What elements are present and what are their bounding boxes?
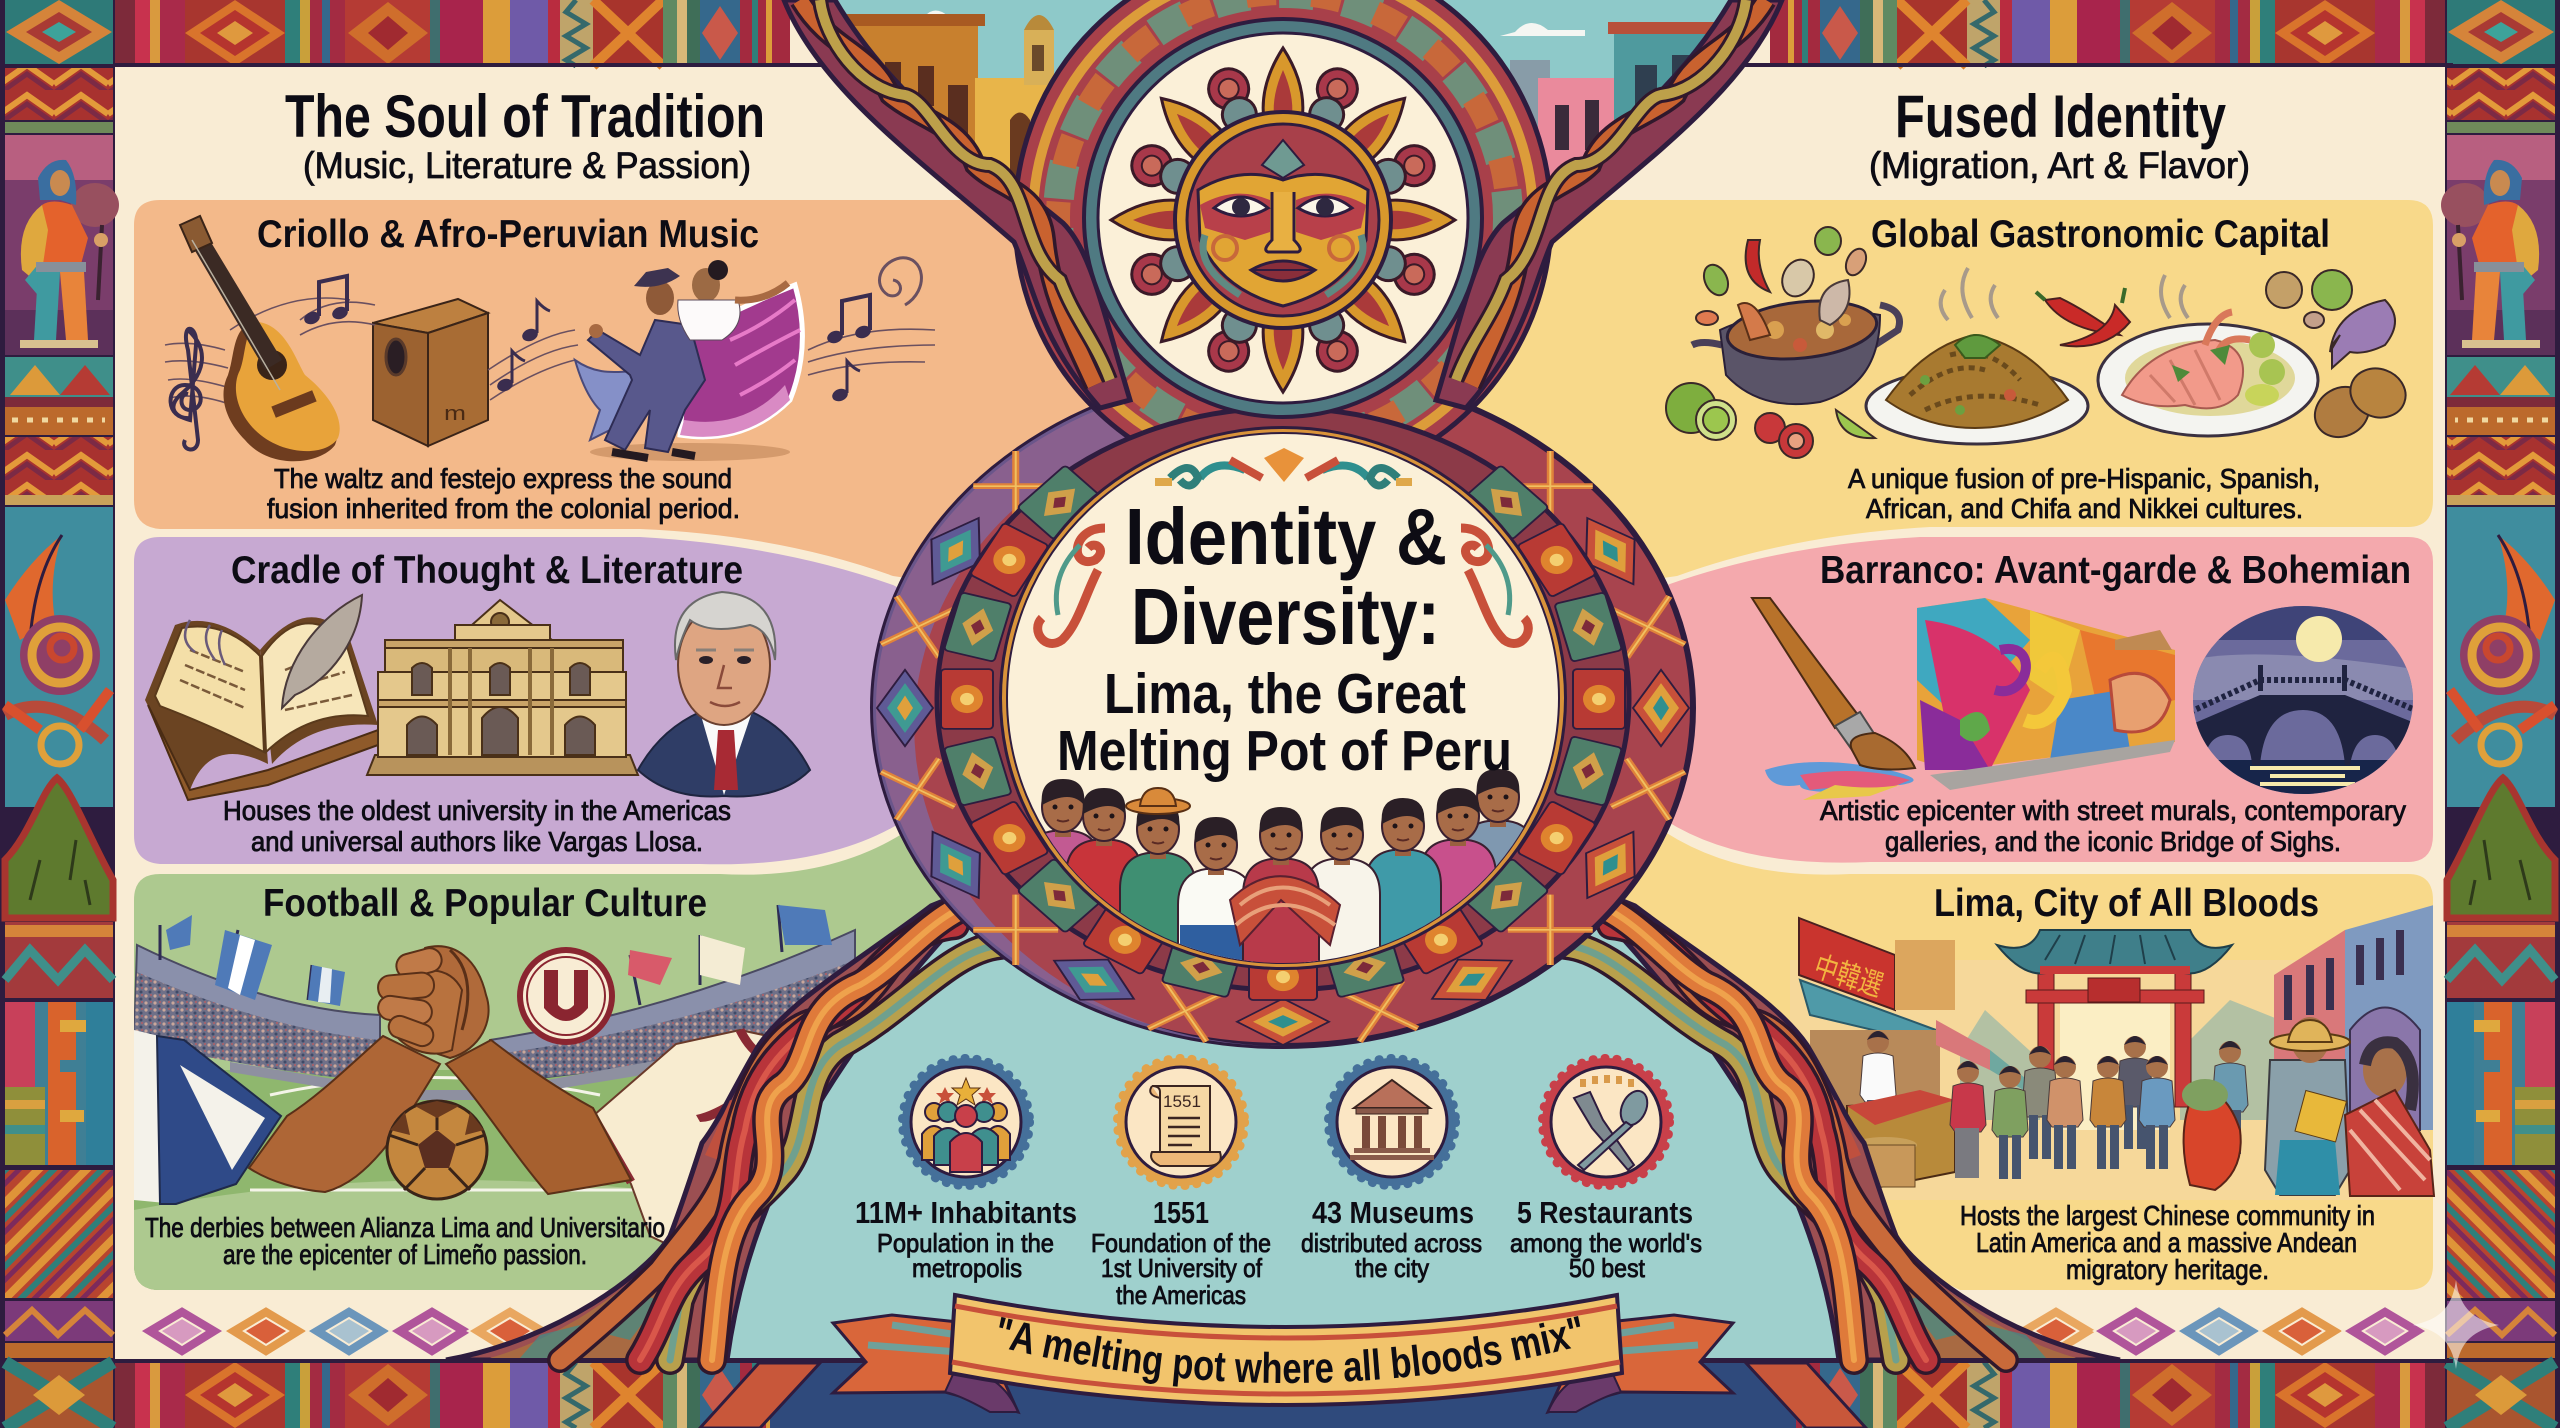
panel: city of all bloods background [1560, 800, 2433, 1290]
literature text: and universal authors like Vargas Llosa. [251, 826, 703, 857]
panel: central medallion outer ring [873, 370, 1693, 1046]
panel: football background [134, 800, 1000, 1290]
panel: gastronomy background [1440, 200, 2433, 610]
football text: The derbies between Alianza Lima and Universitario [145, 1212, 665, 1243]
stat text: inhabitants: 11M+ Inhabitants [855, 1195, 1077, 1230]
gastronomy text: Global Gastronomic Capital [1871, 213, 2330, 256]
barranco text [1820, 549, 2411, 857]
right panel heading [1869, 83, 2250, 186]
top right border strip [1770, 0, 2445, 66]
criollo text: fusion inherited from the colonial period. [267, 493, 740, 524]
barranco text: Artistic epicenter with street murals, contemporary [1820, 795, 2406, 826]
illustration: dancers [575, 260, 802, 461]
illustration: andean couple [2265, 1017, 2434, 1196]
left lower braid band [446, 878, 1000, 1360]
barranco text: Barranco: Avant-garde & Bohemian [1820, 549, 2411, 592]
illustration: cajon [373, 299, 488, 446]
illustration: football [387, 1101, 487, 1199]
sparkle watermark [2413, 1280, 2499, 1369]
literature text: Houses the oldest university in the Americas [223, 795, 731, 826]
city of all bloods text: Lima, City of All Bloods [1934, 882, 2319, 925]
bottom left border strip [115, 1362, 790, 1428]
main title [1057, 492, 1512, 783]
right upper braid band [1436, 0, 1782, 408]
illustration: U badge [517, 947, 615, 1045]
left panel heading [285, 83, 765, 186]
quote ribbon: "A melting pot where all bloods mix" [999, 1316, 1580, 1387]
left panel heading: (Music, Literature & Passion) [303, 145, 751, 186]
right border column [2441, 0, 2560, 1428]
stat text: inhabitants: metropolis [912, 1253, 1022, 1283]
left upper braid band [784, 0, 1130, 408]
teal stats background [727, 850, 1839, 1360]
barranco text: galleries, and the iconic Bridge of Sighs. [1885, 826, 2341, 857]
illustration: rival jerseys [134, 1030, 810, 1260]
illustration: cajon: m [444, 403, 466, 425]
illustration: potatoes and fish [2266, 270, 2413, 447]
right panel heading: Fused Identity [1895, 83, 2227, 150]
stat text: university [1091, 1195, 1271, 1310]
stat text: university: the Americas [1116, 1280, 1246, 1310]
illustration: chinatown gate [1997, 930, 2232, 1107]
ornament: top scroll [1155, 448, 1412, 486]
panel: central medallion middle ring [937, 408, 1629, 1000]
illustration: chili peppers [2036, 288, 2130, 346]
illustration: market crowd [1992, 1036, 2248, 1190]
illustration: university building [367, 600, 638, 775]
city of all bloods text: Hosts the largest Chinese community in [1960, 1200, 2375, 1231]
ornament: left scroll [1038, 528, 1105, 643]
navy ribbon ground [770, 1363, 1796, 1428]
illustration: football stadium [134, 905, 855, 1290]
criollo text [257, 213, 759, 524]
illustration: arms and handshake [249, 945, 631, 1194]
football text [145, 882, 707, 1270]
football text: are the epicenter of Limeño passion. [223, 1239, 587, 1270]
literature text: Cradle of Thought & Literature [231, 549, 743, 592]
stat badge: 1551 scroll: 1551 [1163, 1092, 1201, 1111]
stat text: museums: 43 Museums [1312, 1195, 1474, 1230]
ornament: right scroll [1461, 528, 1528, 643]
illustration: portrait of author [638, 592, 810, 796]
panel: literature background [134, 537, 1000, 864]
stat badge: museum [1328, 1058, 1456, 1186]
stat text: university: Foundation of the [1091, 1228, 1271, 1258]
stat text: restaurants: among the world's [1510, 1228, 1702, 1258]
bottom right border strip [1770, 1362, 2445, 1428]
panel: sun medallion outer ring [1015, 0, 1551, 486]
illustration: floating ingredients [1666, 227, 1875, 458]
stat text: inhabitants: Population in the [877, 1228, 1054, 1258]
stat text: university: 1st University of [1101, 1253, 1263, 1283]
stat text: restaurants [1510, 1195, 1702, 1283]
diagonal border bands near ribbon [700, 1363, 1866, 1428]
illustration: bridge of sighs night [2193, 606, 2413, 794]
right panel heading: (Migration, Art & Flavor) [1869, 145, 2250, 186]
stat text: restaurants: 5 Restaurants [1517, 1195, 1693, 1230]
city of all bloods text: migratory heritage. [2066, 1254, 2269, 1285]
main title: Identity & [1125, 492, 1447, 581]
sun medallion disc [1084, 19, 1482, 417]
city of all bloods text [1934, 882, 2375, 1285]
central cream disc [1007, 433, 1559, 963]
stat badge: 1551 scroll [1117, 1058, 1245, 1186]
illustration: music notes and staff [300, 258, 935, 403]
illustration: ceviche plate [2098, 312, 2318, 436]
illustration: cooking pot [1692, 280, 1900, 404]
illustration: market stall and vendor [1847, 1031, 1986, 1188]
criollo text: Criollo & Afro-Peruvian Music [257, 213, 759, 256]
stat text: museums [1301, 1195, 1482, 1283]
stat badge: restaurants [1542, 1058, 1670, 1186]
illustration: open book and quill [145, 595, 378, 800]
illustration: guitar [165, 216, 350, 461]
stat text: restaurants: 50 best [1569, 1253, 1646, 1283]
gastronomy text: African, and Chifa and Nikkei cultures. [1866, 493, 2303, 524]
right column diamonds [2014, 1306, 2427, 1357]
stat text: museums: distributed across [1301, 1228, 1482, 1258]
central people group [1025, 769, 1536, 1015]
left border column [0, 0, 119, 1428]
main title: Lima, the Great [1104, 662, 1466, 726]
stat text: inhabitants [855, 1195, 1077, 1283]
gastronomy text [1848, 213, 2330, 524]
main title: Melting Pot of Peru [1057, 719, 1512, 783]
stat badge: inhabitants [902, 1058, 1030, 1186]
football text: Football & Popular Culture [263, 882, 707, 925]
stat text: museums: the city [1355, 1253, 1429, 1283]
top left border strip [115, 0, 790, 66]
left column diamonds [140, 1306, 552, 1357]
gastronomy text: A unique fusion of pre-Hispanic, Spanish, [1848, 463, 2320, 494]
illustration: chinatown backdrop: 中韓選 [1810, 950, 1887, 1003]
illustration: rice plate [1866, 268, 2188, 444]
stat text: university: 1551 [1153, 1195, 1209, 1230]
quote ribbon [829, 1292, 1737, 1414]
criollo text: The waltz and festejo express the sound [274, 463, 732, 494]
right lower braid band [1566, 878, 2120, 1360]
illustration: chinatown backdrop [1790, 905, 2434, 1200]
city of all bloods text: Latin America and a massive Andean [1976, 1227, 2357, 1258]
sky and buildings behind top medallion [838, 0, 1728, 176]
icon: inca sun [1111, 48, 1455, 392]
literature text [223, 549, 743, 857]
left panel heading: The Soul of Tradition [285, 83, 765, 150]
panel: criollo music background [134, 200, 1120, 610]
main title: Diversity: [1131, 572, 1440, 661]
illustration: paint brush [1752, 598, 1915, 800]
panel: barranco background [1560, 537, 2433, 863]
illustration: mural wall [1917, 598, 2175, 790]
